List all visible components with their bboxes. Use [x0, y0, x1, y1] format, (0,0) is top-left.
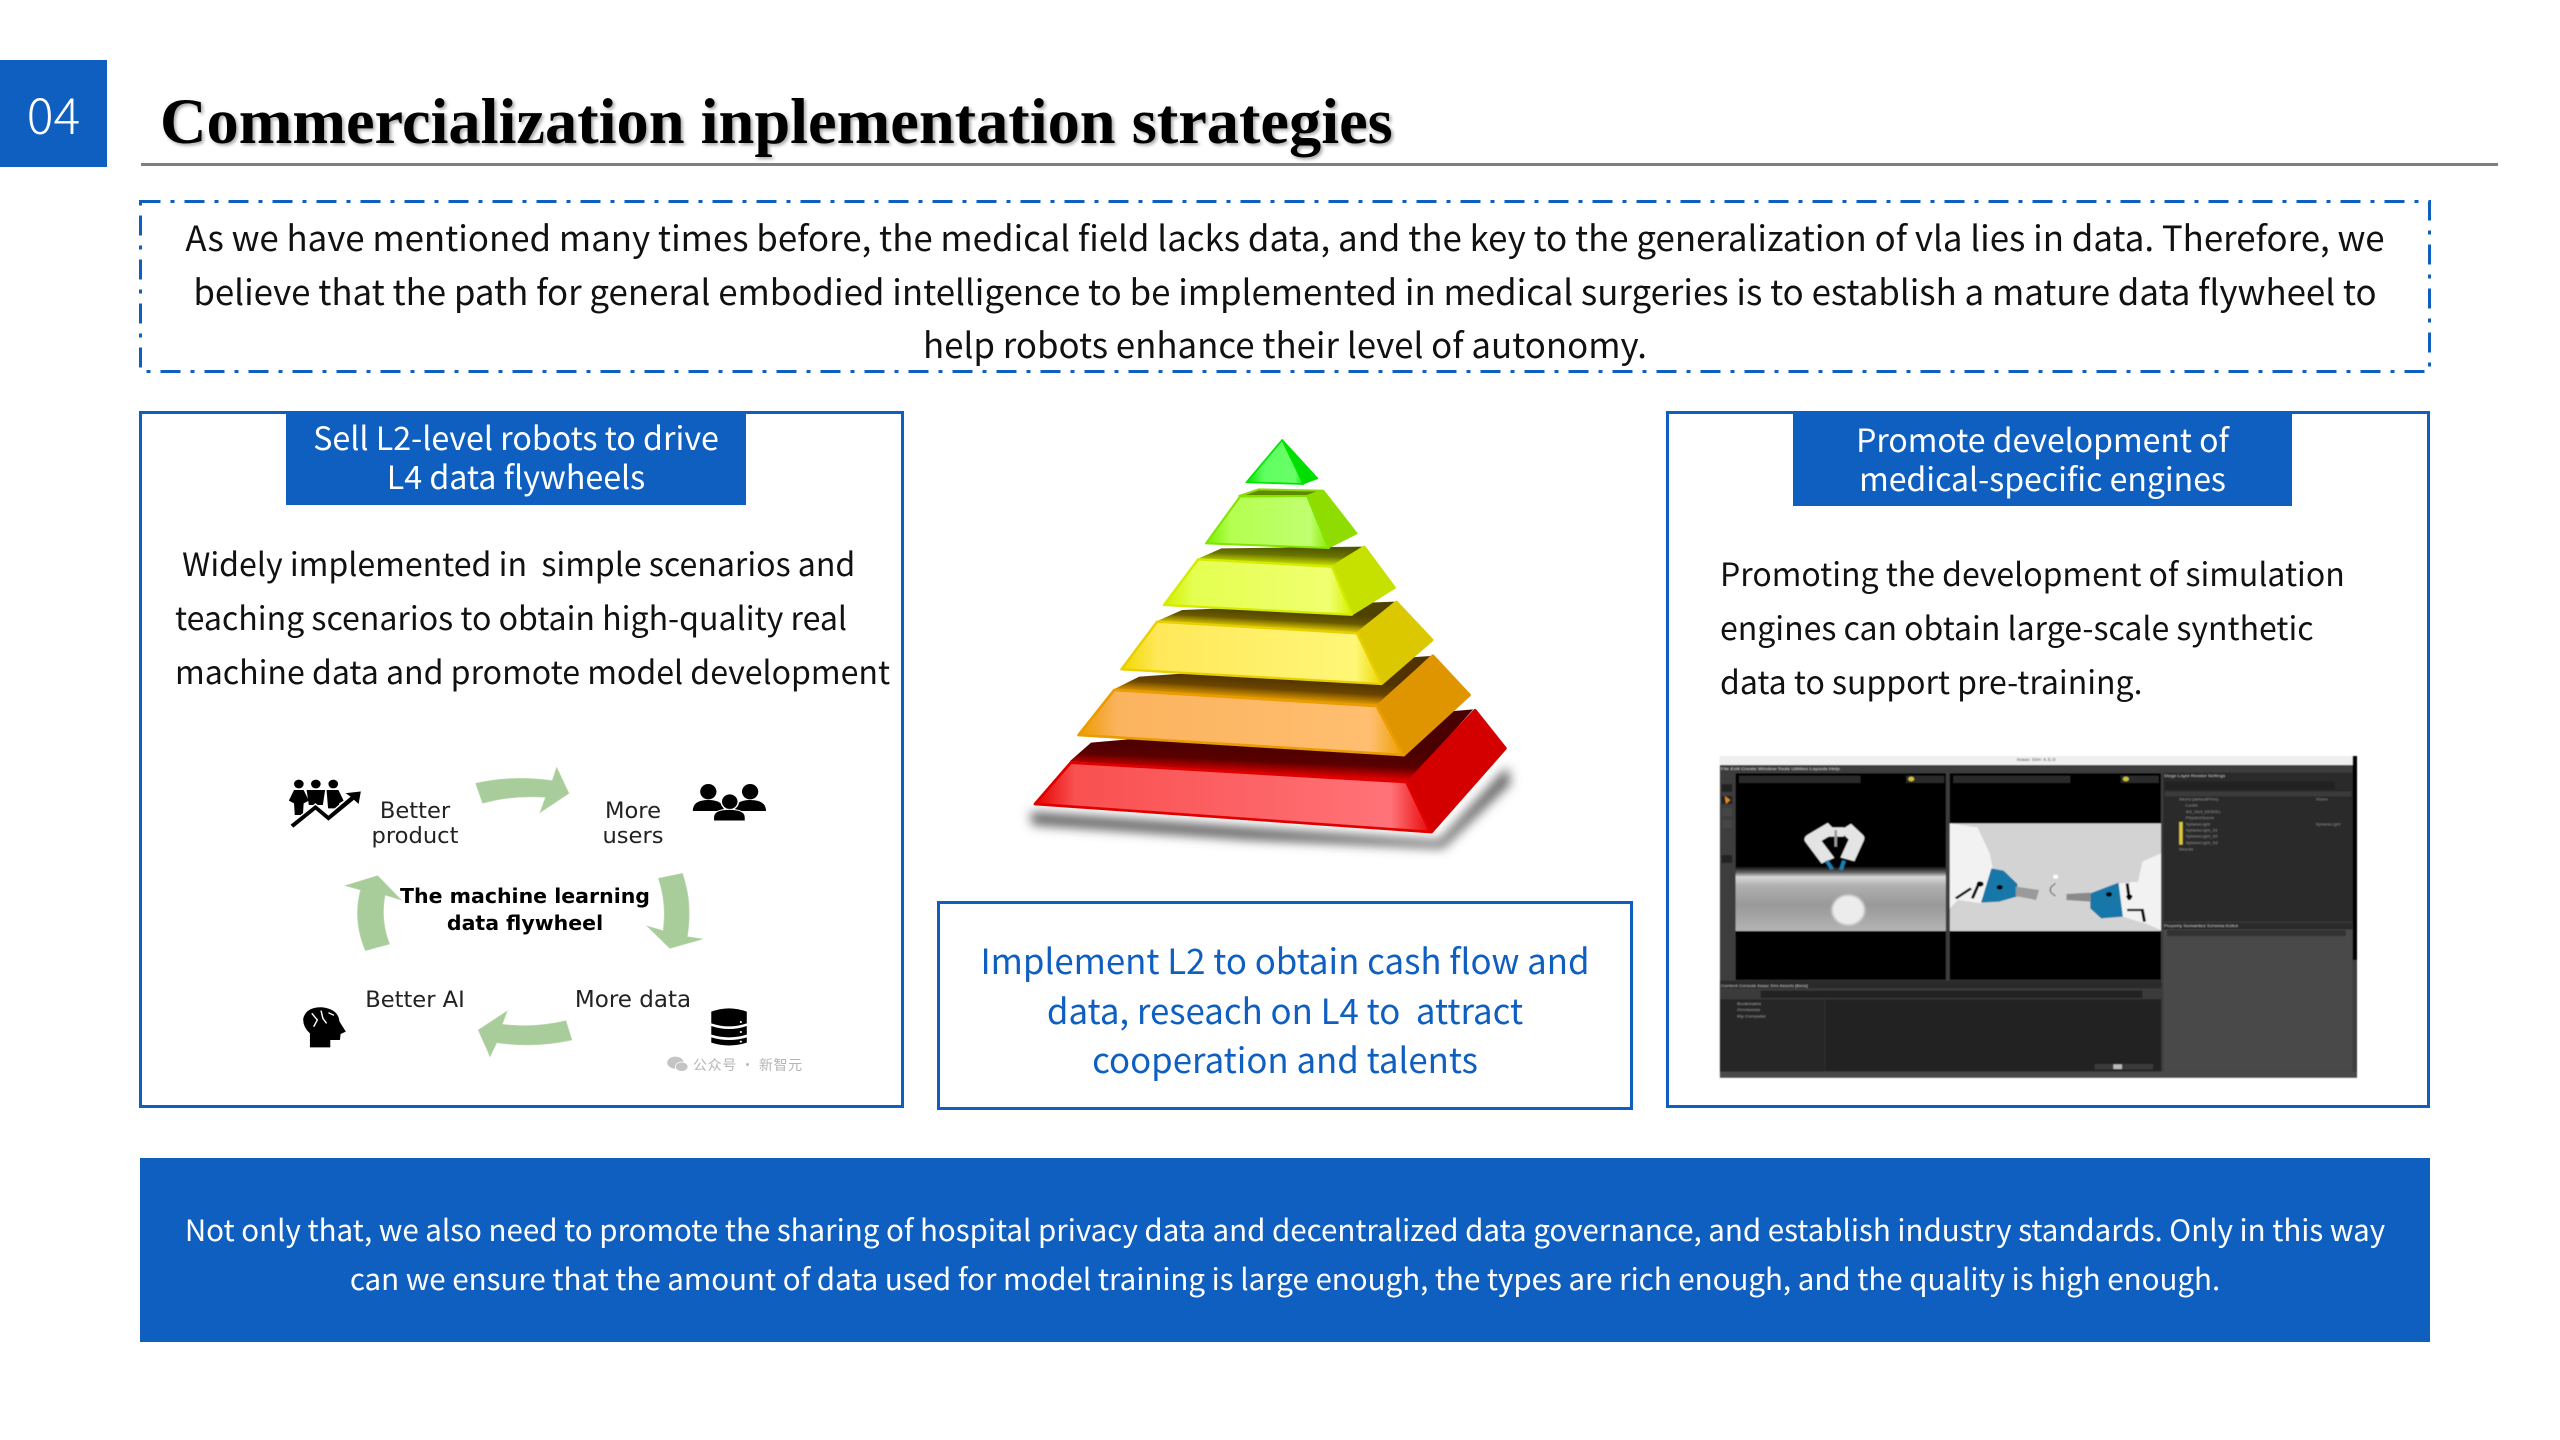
body text: real machine data: machine data and promote model development — [175, 648, 890, 694]
bottom banner: Not only that, we also need to promote the sharing of hospital privacy data and decentralized data governance, and establish industry standards. Only in this way — [185, 1208, 2385, 1250]
panel heading: Sell L2-level robots — [286, 413, 746, 505]
pyramid illustration — [1024, 439, 1518, 856]
stage panel: SphereLight_01 — [2186, 828, 2219, 833]
stage panel: Xform — [2316, 797, 2329, 802]
window frame — [1720, 756, 2357, 1078]
section number badge: 04 — [27, 77, 80, 149]
stage panel: Looks — [2186, 803, 2198, 808]
panel heading: Sell L2-level robots: L4 data flywheels — [387, 453, 645, 499]
panel heading: medical-specific engines — [1793, 413, 2292, 506]
property panel — [2163, 923, 2353, 1072]
icon: users — [693, 784, 766, 821]
menu bar: File Edit Create Window Tools Utilities Layouts Help — [1721, 767, 1840, 771]
body text: simulation engines: engines can obtain large-scale synthetic — [1720, 604, 2314, 650]
arrow: better product to more users — [476, 767, 569, 813]
icon: wechat watermark — [667, 1057, 688, 1071]
right viewport — [1950, 773, 2161, 980]
label: better product: Better — [380, 798, 450, 824]
intro dashed callout — [139, 200, 2431, 373]
stage panel: SphereLight — [2316, 822, 2341, 826]
content browser panel: Content Console Isaac Sim Assets [Beta] — [1721, 984, 1808, 988]
body text: real machine data — [175, 540, 890, 694]
icon: database — [711, 1008, 747, 1046]
label: more users — [602, 798, 664, 849]
flywheel diagram — [288, 766, 803, 1075]
arrow: better AI to better product — [345, 876, 401, 951]
stage panel — [2163, 773, 2353, 922]
stage panel: Needle — [2179, 847, 2194, 851]
tier 6: green apex — [1246, 440, 1317, 484]
tier 5: light green — [1206, 489, 1356, 548]
stage panel: AS_GUI_MODEL — [2186, 810, 2222, 814]
left viewport — [1736, 773, 1946, 980]
content browser panel: My Computer — [1737, 1014, 1767, 1018]
body text: simulation engines — [1720, 550, 2345, 704]
label: better product: product — [372, 823, 458, 849]
body text: real machine data: Widely implemented in simple scenarios and — [182, 540, 855, 586]
panel heading: medical-specific engines: medical-specific engines — [1859, 455, 2226, 501]
label: more users: users — [602, 823, 664, 849]
stage panel: Stage Layer Render Settings — [2164, 774, 2225, 778]
panel heading: Sell L2-level robots: Sell L2-level robots to drive — [313, 414, 719, 460]
label: more data: More data — [575, 987, 691, 1013]
panel: simulation engines — [1666, 411, 2430, 1108]
label: more users: More — [605, 798, 661, 824]
label: flywheel centre: The machine learning — [400, 884, 650, 908]
center callout: data, reseach on L4 to attract — [1047, 984, 1523, 1034]
property panel: Property Semantics Schema Editor — [2164, 924, 2239, 928]
label: better AI: Better AI — [365, 987, 465, 1013]
icon: people and rising trend — [289, 780, 362, 829]
ground shadow — [1030, 767, 1511, 848]
stage panel: SphereLight — [2186, 822, 2211, 826]
center callout: cooperation and talents — [1092, 1034, 1478, 1084]
tier 2: orange — [1079, 656, 1469, 755]
tier 3: yellow — [1121, 602, 1432, 684]
toolbar — [1722, 784, 1732, 863]
intro dashed callout: help robots enhance their level of autonomy. — [923, 319, 1647, 369]
content browser panel — [1720, 981, 2161, 1072]
intro dashed callout: As we have mentioned many times before, the medical field lacks data, and the key to the generalization of vla lies in data. Therefore, we — [185, 212, 2385, 262]
watermark text: 公众号 · 新智元 — [693, 1055, 803, 1075]
center callout — [937, 901, 1633, 1110]
icon: AI head — [303, 1007, 346, 1047]
center callout: Implement L2 to obtain cash flow and — [980, 935, 1590, 985]
stage panel: World (defaultPrim) — [2179, 797, 2219, 802]
content browser panel: Omniverse — [1737, 1008, 1761, 1012]
arrow: more data to better AI — [478, 1011, 572, 1057]
panel: L2 robots and data flywheel — [139, 411, 904, 1108]
body text: real machine data: teaching scenarios to obtain high-quality real — [175, 594, 847, 640]
label: flywheel centre — [400, 884, 650, 935]
body text: simulation engines: data to support pre-training. — [1720, 658, 2142, 704]
tier 1: red — [1035, 709, 1505, 832]
stage panel: SphereLight_03 — [2186, 841, 2219, 845]
stage panel: SphereLight_02 — [2186, 834, 2219, 839]
section number badge — [0, 60, 107, 167]
title: Commercialization inplementation strategies — [160, 86, 1393, 157]
simulator screenshot — [1719, 755, 2358, 1078]
bottom banner — [140, 1158, 2430, 1342]
tier 4: lime — [1164, 547, 1395, 615]
stage panel: PhysicsScene — [2186, 816, 2215, 820]
title bar: Isaac Sim 4.5.0 — [2017, 758, 2056, 763]
title bar — [1720, 756, 2353, 765]
label: better product — [372, 798, 458, 849]
content browser panel: Bookmarks — [1737, 1002, 1761, 1006]
label: flywheel centre: data flywheel — [447, 911, 603, 935]
panel heading: medical-specific engines: Promote development of — [1856, 416, 2229, 462]
arrow: more users to more data — [647, 873, 703, 948]
bottom banner: can we ensure that the amount of data used for model training is large enough, the types are rich enough, and the quality is high enough. — [350, 1257, 2220, 1299]
intro dashed callout: believe that the path for general embodied intelligence to be implemented in medical surgeries is to establish a mature data flywheel to — [193, 266, 2377, 316]
body text: simulation engines: Promoting the development of simulation — [1720, 550, 2345, 596]
